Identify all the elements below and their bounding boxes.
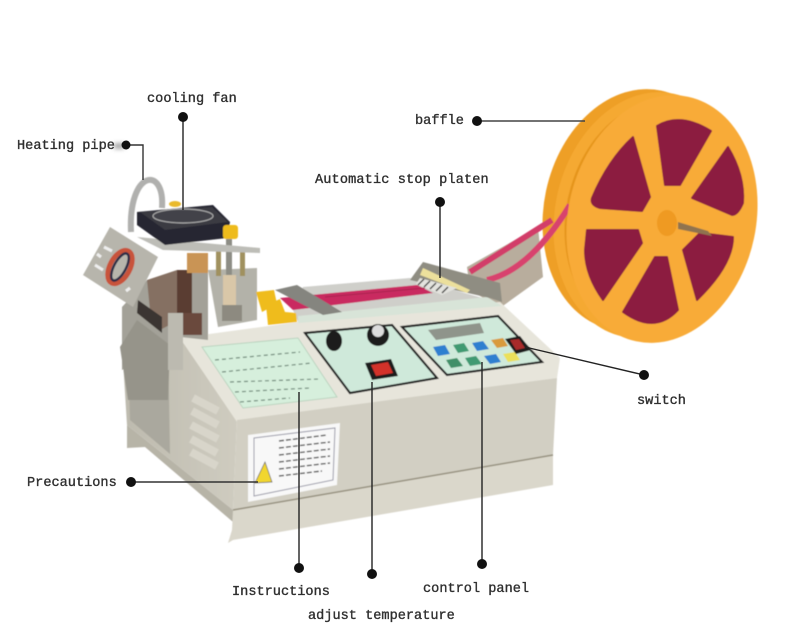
side vents (191, 398, 218, 466)
label: heating pipe (17, 139, 143, 180)
reel axle (678, 222, 712, 236)
guide arm (467, 227, 543, 308)
rear reel flange (521, 72, 751, 348)
buttons (433, 338, 520, 368)
reel hub (657, 210, 677, 236)
label: adjust temperature: adjust temperature (308, 609, 455, 624)
small knob (326, 331, 342, 351)
pressing bar (275, 285, 342, 315)
red rocker switch (365, 359, 398, 380)
front reel flange (544, 77, 780, 361)
label: switch (525, 347, 686, 409)
yellow clamp block (256, 290, 297, 325)
label: cooling fan (147, 92, 237, 210)
label: baffle: baffle (415, 114, 464, 129)
cooling fan unit (137, 201, 230, 245)
power switch (505, 336, 531, 354)
middle reel flange (531, 74, 765, 356)
top mount plate (137, 237, 260, 253)
label: control panel (423, 362, 529, 597)
label: control panel: control panel (423, 582, 529, 597)
label: instructions: Instructions (232, 585, 330, 600)
control panel (402, 316, 542, 375)
table plate (293, 278, 490, 322)
side panel (122, 338, 237, 510)
label: precautions (27, 476, 258, 491)
heating pipe tube (131, 180, 162, 232)
cut tapes on table (280, 285, 433, 310)
warning label (248, 423, 340, 502)
temperature panel (305, 324, 437, 393)
yellow knob (223, 225, 238, 239)
front face (233, 378, 557, 510)
digital display (428, 323, 484, 340)
label: automatic stop platen (315, 173, 489, 278)
table top (180, 302, 560, 422)
label: adjust temperature (308, 382, 455, 624)
label: heating pipe: Heating pipe (17, 139, 115, 154)
label: automatic stop platen: Automatic stop platen (315, 173, 489, 188)
mechanism frame (120, 253, 208, 400)
label: baffle (415, 114, 585, 129)
ruler (298, 297, 502, 323)
warning triangle (255, 462, 272, 483)
reel windows (585, 120, 743, 323)
tape reel front (544, 77, 780, 361)
base lip (127, 425, 233, 522)
machine photo (83, 72, 780, 543)
side door (128, 340, 170, 454)
automatic stop platen (410, 262, 502, 302)
temperature knob (367, 324, 389, 346)
spring mechanism (208, 232, 257, 327)
label: cooling fan: cooling fan (147, 92, 237, 107)
label: switch: switch (637, 394, 686, 409)
angled metal plate (83, 227, 158, 307)
label: precautions: Precautions (27, 476, 117, 491)
upper guide tape (470, 220, 552, 272)
instruction panel (202, 338, 337, 408)
lower guide tape (487, 205, 570, 280)
label: instructions (232, 392, 330, 600)
lower base strip (228, 455, 553, 543)
